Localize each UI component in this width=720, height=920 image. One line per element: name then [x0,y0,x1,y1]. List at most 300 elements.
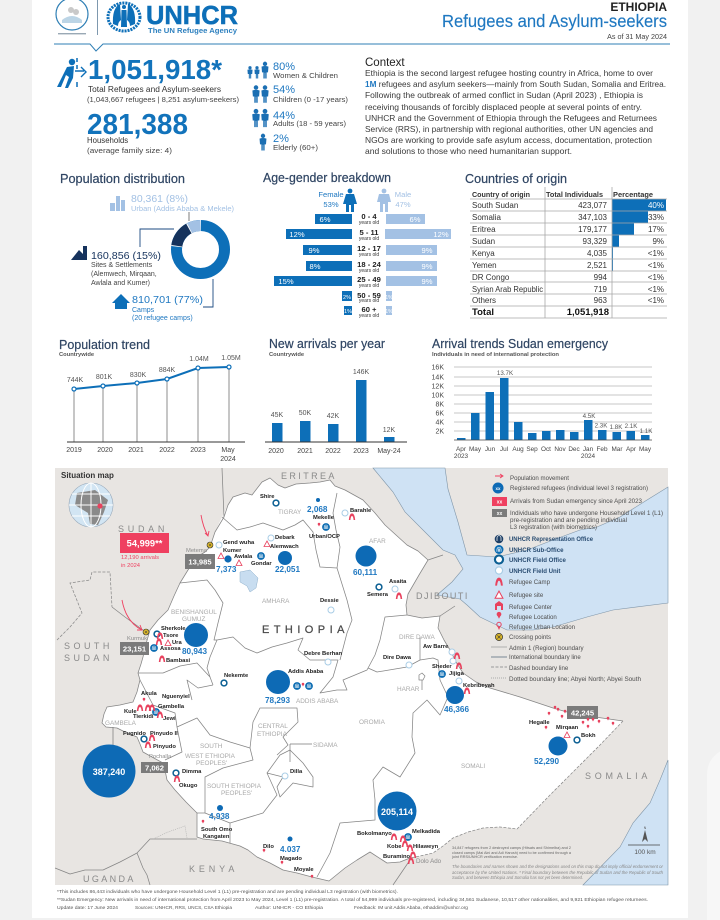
legend labels: UNHCR Representation Office [509,536,594,543]
age labels: 12 - 17 [357,244,381,253]
big circle values [93,767,413,817]
stat: children: 54% [273,84,295,96]
divider [96,0,99,35]
subtitle: Countrywide [269,352,305,358]
population values [182,505,559,854]
place labels: Dire Dawa [383,655,412,661]
bar chart: 1.1K [640,428,653,435]
country labels: SUDAN [64,653,112,663]
line chart: 1.04M [189,356,209,363]
legend labels [509,475,663,683]
place labels: Awlala [234,554,253,560]
grey pending boxes: 7,062 [145,764,164,772]
table individuals [567,201,609,318]
place labels: Debark [275,535,295,541]
bar chart: 2023 [353,448,369,455]
connector: camps [203,279,213,307]
bar chart: 2021 [297,448,313,455]
legend labels: Refugee Location [509,614,557,621]
footer notes [57,889,648,910]
line chart: 2023 [190,447,206,454]
decorative side card [707,745,720,920]
bar values: 9% [309,246,320,255]
panel: new arrivals per year [265,337,407,455]
note on destroyed camps [451,846,571,859]
age labels: 5 - 11 [360,228,379,237]
line chart: 801K [96,374,112,381]
bar chart: 2022 [325,448,341,455]
bar values: 6% [410,215,421,224]
place labels: Kangaten [203,834,230,840]
place labels: Dimma [182,769,202,775]
context text [365,68,666,156]
stat: children: Children (0 -17 years) [273,97,348,104]
map legend [491,474,663,683]
age labels: years old [359,252,379,258]
table percentages: 17% [648,225,664,234]
bar chart: 2.1K [625,423,638,430]
Ilemi Triangle [153,826,187,839]
population values: 22,051 [275,565,300,574]
table country names: Others [472,296,496,305]
legend labels: Dashed boundary line [509,665,569,672]
legend labels: Refugee site [509,592,544,599]
place labels: Dilo [263,844,274,850]
country title: ETHIOPIA [610,0,667,14]
map disclaimer: acceptance by the United Nations. * Final boundary between the Republic of Sudan and the Republic of South [452,870,664,875]
icon: sites and settlements [71,246,87,260]
stat: adults [252,109,346,128]
dashed boundaries [57,572,623,858]
bar chart: 12K [432,384,444,390]
stat: adults: Adults (18 - 59 years) [273,121,346,128]
urban value: 80,361 (8%) [131,194,188,205]
grey border place labels [127,548,442,865]
population values: 2,068 [307,505,328,514]
map disclaimer: Sudan, and between Ethiopia and Somalia has not yet been determined. [452,875,583,880]
age labels: 0 - 4 [361,212,377,221]
bar chart: May [469,446,482,453]
camps caption [132,307,193,322]
place labels: Nguenyiel [162,694,190,700]
table individuals: 994 [594,273,608,282]
Red Sea and Gulf of Aden [373,468,668,630]
bar chart: 2020 [268,448,284,455]
bar chart: 14K [432,374,444,382]
country labels: KENYA [189,864,237,874]
table header: Total Individuals [546,190,603,199]
male label: Male [395,190,411,199]
place labels: Fugnido [123,731,146,737]
table percentages: <1% [648,296,664,305]
table country names: DR Congo [472,273,510,282]
bar chart: 2024 [581,453,596,460]
bar chart: 2K [435,428,444,436]
country labels: SOUTH [64,641,112,651]
legend labels: Population movement [510,475,569,482]
camps caption: Camps [132,307,155,314]
icon: female [343,189,357,212]
place labels: Gondar [251,561,272,567]
subtitle: Individuals in need of international protection [432,352,559,358]
place labels: Hilaweyn [413,844,439,850]
icon: male [377,189,391,212]
population values: 7,373 [216,565,237,574]
place labels: Asaita [389,579,407,585]
table country names: Kenya [472,249,495,258]
line chart: 2021 [128,447,144,454]
markers: refugee camps [137,513,470,864]
partner logo [56,0,88,34]
place labels: Bokh [581,733,596,739]
panel: situation map [55,468,668,885]
line chart: 884K [159,367,175,374]
bar chart: 10K [432,392,444,400]
table individuals: 4,035 [587,249,608,258]
bar chart [265,369,407,455]
table country names: Total [472,307,494,318]
line chart: 2024 [220,456,236,463]
scale bar and north arrow [628,826,660,856]
table percentages: 40% [648,201,664,210]
context [365,57,666,156]
place labels: Bokolmanyo [357,831,392,837]
place labels: Melkadida [412,829,441,835]
legend symbols: xx [497,500,502,506]
table percentages: <1% [648,273,664,282]
header [54,0,670,51]
Sudan emergency arrivals callout: in 2024 [121,563,141,569]
markers: refugee sites [165,541,570,738]
region labels: ETHIOPIA [257,731,288,738]
map land background [55,468,668,885]
bar chart: 6K [435,410,444,418]
grey border place labels: Dolo Ado [416,858,442,865]
bar values: 12% [289,230,305,239]
UNHCR emblem [108,3,140,31]
region labels: AMHARA [262,598,290,605]
bar chart: 42K [327,413,340,420]
table individuals: 347,103 [578,213,608,222]
country labels: ERITREA [281,471,337,481]
place labels: Jijiga [449,671,465,677]
table individuals: 963 [594,296,608,305]
age labels: 50 - 59 [357,291,381,300]
place labels [123,494,596,873]
country labels: UGANDA [83,874,136,884]
place labels: Addis Ababa [288,669,324,675]
bar values: 15% [278,277,294,286]
country labels [64,471,650,884]
Sudan emergency arrivals callout: 12,190 arrivals [121,555,159,561]
region labels: TIGRAY [278,509,302,516]
place labels: Kule [124,709,137,715]
bar chart: 8K [435,402,444,408]
legend labels: Dotted boundary line; Abyei North; Abyei South [509,676,641,683]
bar chart: 4K [435,420,444,426]
region labels: AFAR [369,538,386,545]
context text: 1M refugees and asylum seekers—mainly from South Sudan, Somalia and Eritrea. [365,79,666,89]
place labels: Debre Berhan [304,651,342,657]
bar chart: 13.7K [497,370,514,377]
arrow: urban [188,212,190,221]
bar chart: Jan [583,446,594,453]
place labels: Jewi [163,716,176,722]
region boundaries [138,493,448,877]
age labels: years old [359,283,379,289]
pyramid bars male [385,214,451,315]
sites caption [91,262,157,287]
table country names: Eritrea [472,225,496,234]
population values: 52,290 [534,757,559,766]
region labels: OROMIA [359,719,386,726]
bar chart: Feb [596,446,608,453]
Ethiopia landmass [102,478,623,881]
population values: 4,938 [209,812,230,821]
legend symbols: xx [497,511,502,517]
map disclaimer: The boundaries and names shown and the designations used on this map do not imply official endorsement or [452,864,664,869]
stat: elderly: Elderly (60+) [273,145,318,152]
table country names [472,201,543,318]
region labels: ADDIS ABABA [296,698,339,705]
line chart: May [221,447,235,454]
bar chart: Sep [526,446,538,453]
place labels: Kumer [223,548,242,554]
stat: elderly [260,133,318,152]
bar chart: 2023 [454,453,469,460]
legend labels: International boundary line [509,654,581,661]
panel: age-gender breakdown [263,171,451,319]
place labels: Moyale [294,867,314,873]
line chart: 2019 [66,447,82,454]
age labels: years old [359,268,379,274]
stat: adults: 44% [273,110,295,122]
map disclaimer [452,864,664,880]
male label: 47% [395,200,411,209]
context text: Following the outbreak of armed conflict in Sudan (April 2023) , Ethiopia is [365,90,643,100]
bar chart: May [639,446,652,453]
bar chart: 4.5K [583,413,596,420]
urban caption: Urban (Addis Ababa & Mekele) [131,206,234,213]
age labels: years old [359,220,379,226]
table individuals: 423,077 [578,201,608,210]
tagline: The UN Refugee Agency [148,26,238,35]
place labels: Magado [280,856,302,862]
place labels: Aw Barre [423,644,449,650]
table header [472,190,653,199]
table individuals: 93,329 [583,237,608,246]
camps value: 810,701 (77%) [132,294,203,306]
population values: 46,366 [444,705,469,714]
region labels: PEOPLES' [221,790,252,797]
bar values: 6% [320,215,331,224]
place labels: Barahle [350,508,372,514]
table percentages: <1% [648,285,664,294]
table grid [470,187,667,318]
age labels: 25 - 49 [357,275,381,284]
international boundaries [55,468,623,885]
line chart: 2022 [159,447,175,454]
bar values: 9% [422,262,433,271]
bar chart: 16K [432,364,444,372]
age labels [357,212,382,319]
place labels: Mirqaan [556,725,579,731]
legend labels: Refugee Center [509,604,552,611]
arrows: population movement [122,515,209,630]
region labels: PEOPLES' [196,760,227,767]
place labels: Urban/OCP [309,534,340,540]
bar chart: May-24 [377,448,401,455]
table individuals: 1,051,918 [567,307,609,318]
markers: field offices [141,500,580,776]
icon: urban buildings [110,196,125,211]
country labels: ETHIOPIA [262,624,347,636]
bar chart: Dec [568,446,580,453]
heading: Population trend [59,338,150,352]
date: As of 31 May 2024 [607,32,667,41]
table percentages: 33% [648,213,664,222]
place labels: Semera [367,592,389,598]
sites caption: Awlala and Kumer) [91,280,150,287]
scale bar and north arrow: N [644,826,647,830]
heading: Population distribution [60,172,185,186]
legend labels: Registered refugees (individual level 3 registration) [510,485,648,492]
place labels: Sheder [432,664,452,670]
scale bar and north arrow: 100 km [634,849,656,856]
context text: NGOs are working to provide safe asylum access, documentation, protection [365,135,652,145]
region labels: CENTRAL [258,723,288,730]
place labels: Kobe [387,844,402,850]
legend labels: Arrivals from Sudan emergency since April 2023 [510,498,643,505]
legend labels: Refugee Urban Location [509,624,575,631]
place labels: Sherkole [161,626,186,632]
grey border place labels: Kurmuk [127,636,147,642]
female label: Female [318,190,344,199]
context text: Service (RRS), in partnership with regional authorities, other UN agencies and [365,124,653,134]
table individuals: 719 [594,285,608,294]
place labels: Assosa [160,646,181,652]
note on destroyed camps: closed camps (Mai Aini and Adi Harush) need to be confirmed through a [452,851,571,855]
bar values: 1% [385,295,393,301]
bar chart: 146K [353,369,369,376]
icon: person crossing border [57,58,86,88]
bar chart: Jul [500,446,508,453]
bar chart: 1.8K [610,424,623,431]
bar chart: Oct [541,446,551,453]
bar chart: Aug [512,446,524,453]
table percentages: <1% [648,249,664,258]
footer notes: Update date: 17 June 2024 [57,905,118,910]
place labels: Pinyudo II [150,731,178,737]
footer notes: *This includes 86,443 individuals who have undergone Household Level 1 (L1) pre-registration and are pending individual L3 registration (with biometrics). [57,889,398,894]
place labels: Ura [172,640,182,646]
legend labels: Crossing points [509,634,551,641]
context text: and solutions to those who need humanitarian support. [365,146,572,156]
region labels: SIDAMA [313,742,338,749]
place labels: Buramino [383,854,411,860]
bar values: 12% [433,230,449,239]
place labels: Nekemte [224,673,249,679]
context heading: Context [365,57,405,69]
legend labels: Admin 1 (Region) boundary [509,645,584,652]
grey pending boxes: 23,151 [123,644,147,654]
region labels: GAMBELA [105,720,137,727]
table country names: Sudan [472,237,495,246]
grey pending boxes: 13,985 [188,558,212,566]
bar values: 9% [422,277,433,286]
context text: receiving thousands of forcibly displaced people at several points of entry. [365,102,642,112]
context text: UNHCR and the Government of Ethiopia through the Refugees and Returnees [365,113,657,123]
stat: women and children [247,61,338,80]
legend labels: UNHCR Sub-Office [509,547,564,554]
female label: 53% [323,200,339,209]
population values: 78,293 [265,696,290,705]
place labels: Dilla [290,769,303,775]
table country names: Syrian Arab Republic [472,285,543,294]
camps caption: (20 refugee camps) [132,315,193,322]
population values: 60,111 [353,568,378,577]
table country names: South Sudan [472,201,518,210]
place labels: Dessie [320,598,339,604]
table header: Country of origin [472,190,530,199]
donut chart [176,226,224,274]
population values: 4.037 [280,845,301,854]
sites caption: (Alemwech, Mirqaan, [91,271,157,278]
stat: children [252,84,348,104]
table individuals: 179,177 [578,225,608,234]
population values: 80,943 [182,647,207,656]
female label [318,190,344,209]
households figure: 281,388 [87,109,188,141]
bar chart: 45K [271,412,284,419]
note on destroyed camps: 34,847 refugees from 2 destroyed camps (Hitsats and Shimelba) and 2 [452,846,571,850]
bar values: 1% [385,309,393,315]
legend labels: pre-registration and are pending individual [510,517,627,524]
bar chart: Mar [611,446,623,453]
bar values: 1% [344,309,352,315]
place labels: Alemwach [270,544,299,550]
grey pending boxes: 42,245 [571,708,595,718]
male label [395,190,411,209]
footer notes: **Sudan Emergency: New arrivals in need of international protection from April 2023 to May 2024, Level 1 (L1) pre-registration. A total of 54,999 individuals pre-registered, including 34,561 Sudanese, 10,517 other nationalities, and 9,921 Ethiopian refugee returnees. [57,897,648,902]
households caption: Households [87,136,128,145]
table percentages: <1% [648,261,664,270]
bar values: 2% [343,295,351,301]
line chart: 744K [67,377,83,384]
age labels: years old [359,298,379,304]
legend labels: UNHCR Field Office [509,557,566,564]
place labels: Gambella [158,704,185,710]
place labels: Shire [260,494,275,500]
region labels [105,509,485,797]
percentage bars [612,199,666,271]
legend symbols: xx [495,486,501,491]
place labels: Tsore [163,633,179,639]
grey pending boxes [120,554,598,773]
stat: women and children: Women & Children [273,73,338,80]
panel: population distribution [60,172,234,322]
table country names: Yemen [472,261,497,270]
demographic stats [247,61,348,152]
UNHCR wordmark: UNHCR [146,0,238,30]
table country names: Somalia [472,213,501,222]
region labels: GUMUZ [182,616,206,623]
region labels: SOUTH [200,743,223,750]
bar chart: 50K [299,410,312,417]
grey border place labels: Pochalla [149,754,172,760]
heading: New arrivals per year [269,337,385,351]
stat: elderly: 2% [273,133,289,145]
